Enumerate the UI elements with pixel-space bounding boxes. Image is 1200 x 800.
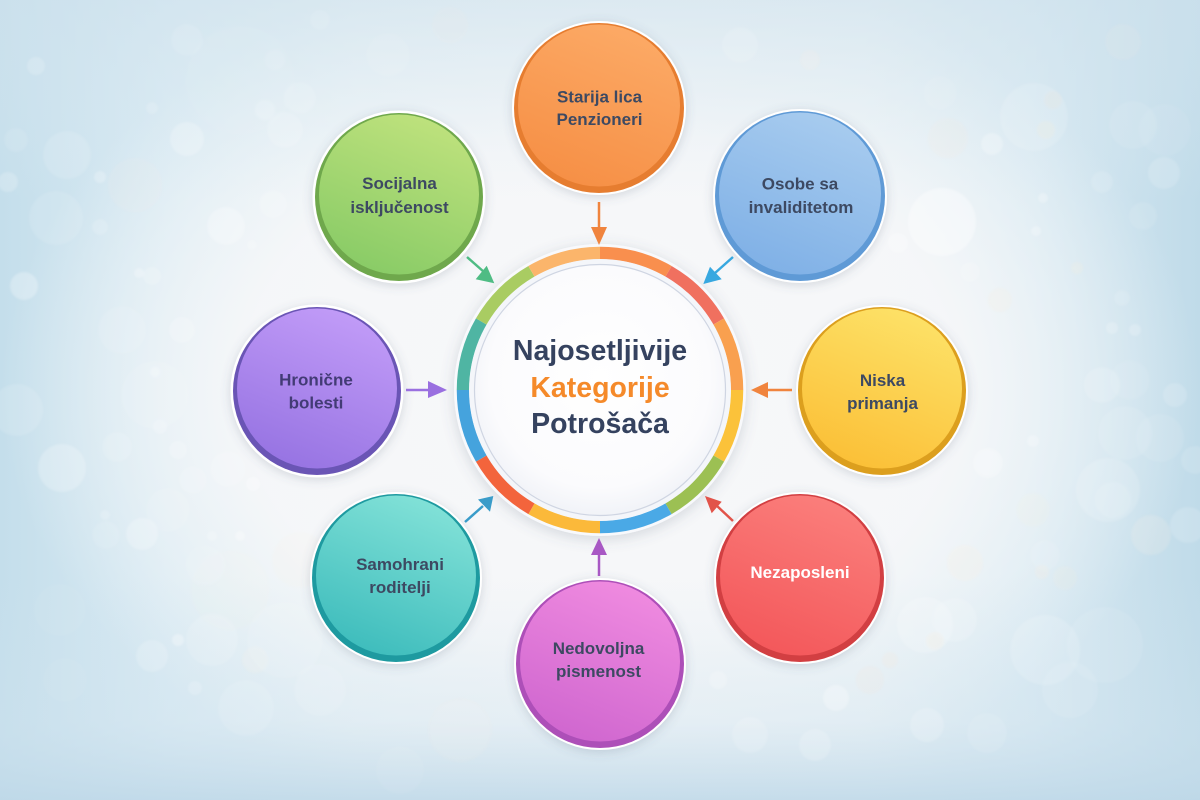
arrow: Nedovoljna pismenost to centre: [591, 538, 607, 576]
bubble: Nezaposleni: Nezaposleni: [750, 563, 850, 582]
arrow: Hronične bolesti to centre: [406, 381, 447, 398]
inner white disc: [469, 259, 731, 521]
segmented colour ring: [463, 253, 737, 527]
bubble: Starija lica / Penzioneri: Penzioneri: [557, 110, 642, 129]
centre title: Potrošača: [531, 408, 670, 440]
arrow: Socijalna isključenost to centre: [467, 257, 494, 283]
bubble: Nedovoljna pismenost: Nedovoljna: [553, 639, 645, 658]
outer white disc: [454, 244, 746, 536]
bubble: Nedovoljna pismenost: [514, 578, 686, 750]
centre title: Kategorije: [530, 372, 670, 404]
centre title: [513, 335, 687, 440]
bubble: Hronične bolesti: Hronične: [279, 370, 353, 390]
arrow: Samohrani roditelji to centre: [465, 496, 493, 522]
bubble: Starija lica / Penzioneri: [512, 21, 686, 195]
bubble: Hronične bolesti: bolesti: [289, 394, 343, 412]
bubble: Nezaposleni: [714, 492, 886, 664]
arrow: Nezaposleni to centre: [705, 496, 733, 521]
arrow: Niska primanja to centre: [751, 382, 792, 398]
bubble: Socijalna isključenost: isključenost: [350, 198, 449, 217]
bubble: Niska primanja: Niska: [860, 371, 906, 390]
bubble: Socijalna isključenost: [312, 110, 486, 284]
arrow: Osobe sa invaliditetom to centre: [703, 257, 733, 284]
arrow: Starija lica to centre: [591, 202, 607, 245]
centre title: Najosetljivije: [513, 335, 687, 367]
bubble: Hronične bolesti: [230, 304, 404, 478]
bubble: Samohrani roditelji: [310, 492, 482, 664]
bubble: Samohrani roditelji: roditelji: [369, 578, 431, 597]
bubble: Osobe sa invaliditetom: [713, 109, 887, 283]
bubble: Starija lica / Penzioneri: Starija lica: [557, 88, 643, 106]
bubble: Niska primanja: primanja: [847, 394, 918, 413]
bubble: Niska primanja: [796, 305, 968, 477]
bubble: Socijalna isključenost: Socijalna: [362, 174, 437, 193]
bubble: Nedovoljna pismenost: pismenost: [556, 662, 641, 681]
bubble: Osobe sa invaliditetom: Osobe sa: [762, 174, 839, 194]
central circle: [454, 244, 746, 536]
bubble: Osobe sa invaliditetom: invaliditetom: [749, 198, 853, 217]
bubble: Samohrani roditelji: Samohrani: [356, 555, 444, 574]
